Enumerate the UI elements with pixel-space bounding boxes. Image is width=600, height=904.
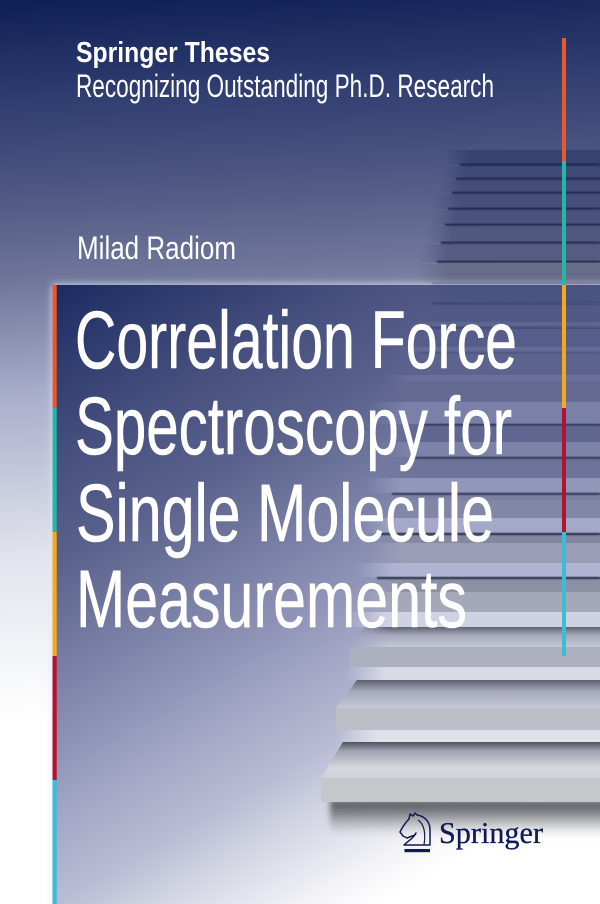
step 3 from bottom xyxy=(345,627,600,680)
left color bar xyxy=(52,285,57,904)
bottom step xyxy=(321,742,600,842)
panel glow xyxy=(52,284,600,904)
middle staircase xyxy=(345,285,600,627)
title xyxy=(75,295,517,645)
icon: knight xyxy=(400,813,430,852)
series name: Springer Theses xyxy=(76,37,270,69)
author: Milad Radiom xyxy=(77,230,236,266)
Springer logo xyxy=(400,813,544,852)
right color bar xyxy=(562,38,566,656)
series name xyxy=(76,37,494,104)
panel fill xyxy=(53,285,600,904)
step 2 from bottom xyxy=(335,680,600,742)
wordmark: Springer xyxy=(439,815,544,850)
upper staircase xyxy=(418,150,600,284)
